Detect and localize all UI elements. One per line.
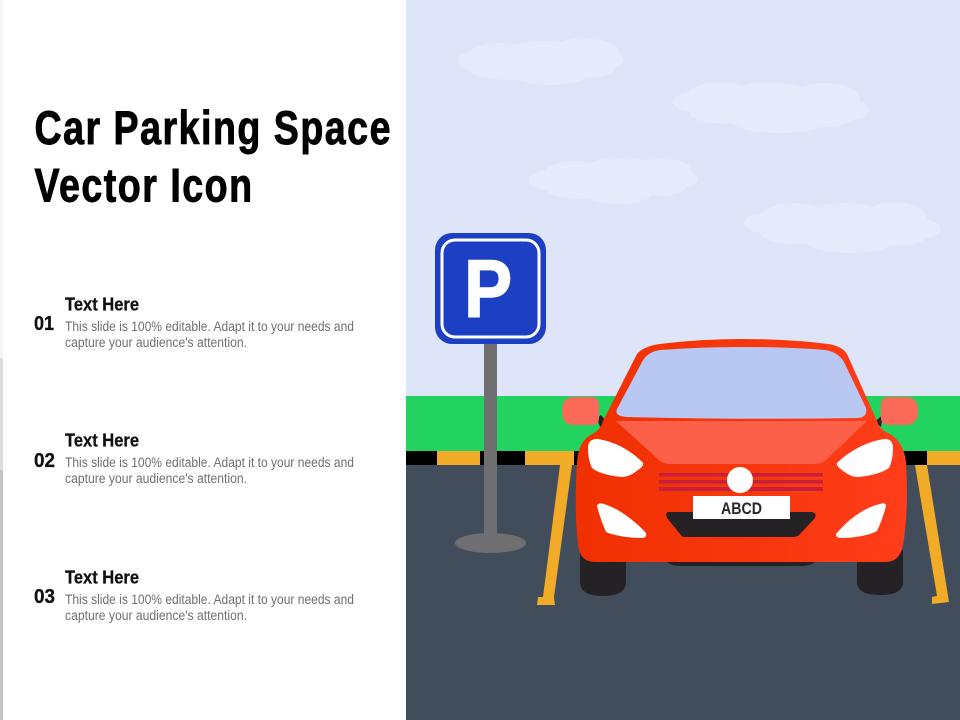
curb stripes — [406, 451, 960, 465]
parking sign — [435, 233, 546, 553]
list item 01: capture your audience's attention. — [65, 335, 247, 350]
parking bay line right — [915, 465, 949, 604]
list item 03: capture your audience's attention. — [65, 608, 247, 623]
road — [406, 465, 960, 720]
panel: parking scene — [406, 0, 960, 720]
list item 01: 01 — [34, 313, 54, 335]
tyres — [580, 550, 626, 596]
sky — [406, 0, 960, 396]
list item 01: Text Here — [65, 294, 139, 314]
headlight left — [588, 439, 643, 477]
hood — [616, 421, 867, 464]
list item 02: 02 — [34, 450, 55, 472]
badge — [727, 467, 753, 493]
sign base — [455, 533, 526, 553]
sign letter: P — [464, 244, 512, 335]
headlight right — [837, 439, 893, 477]
mirror arms — [597, 415, 606, 427]
number plate — [693, 496, 790, 519]
windshield — [616, 347, 866, 419]
list item 03: Text Here — [65, 568, 139, 588]
clouds — [458, 38, 941, 253]
sign post — [484, 342, 497, 540]
list item 03: 03 — [34, 586, 55, 608]
car body — [576, 339, 907, 562]
list item 03: This slide is 100% editable. Adapt it to your needs and — [65, 592, 354, 607]
title: Car Parking Space — [34, 102, 391, 155]
lower air intake — [666, 512, 816, 537]
grass — [406, 396, 960, 451]
car — [562, 339, 918, 596]
grille bars — [659, 473, 823, 491]
list item 02: Text Here — [65, 430, 139, 450]
list item 02 — [34, 430, 354, 486]
list item 01 — [34, 294, 354, 350]
mirrors — [562, 397, 599, 425]
sign board — [435, 233, 546, 344]
parking bay line left — [537, 465, 572, 605]
list item 03 — [34, 568, 354, 623]
title — [34, 102, 390, 213]
list item 02: capture your audience's attention. — [65, 471, 247, 486]
under tray — [665, 560, 817, 566]
title: Vector Icon — [34, 160, 252, 213]
number plate: ABCD — [721, 499, 762, 518]
list item 02: This slide is 100% editable. Adapt it to your needs and — [65, 455, 354, 470]
fog light right — [836, 503, 886, 538]
fog light left — [597, 503, 646, 538]
list item 01: This slide is 100% editable. Adapt it to your needs and — [65, 319, 354, 334]
